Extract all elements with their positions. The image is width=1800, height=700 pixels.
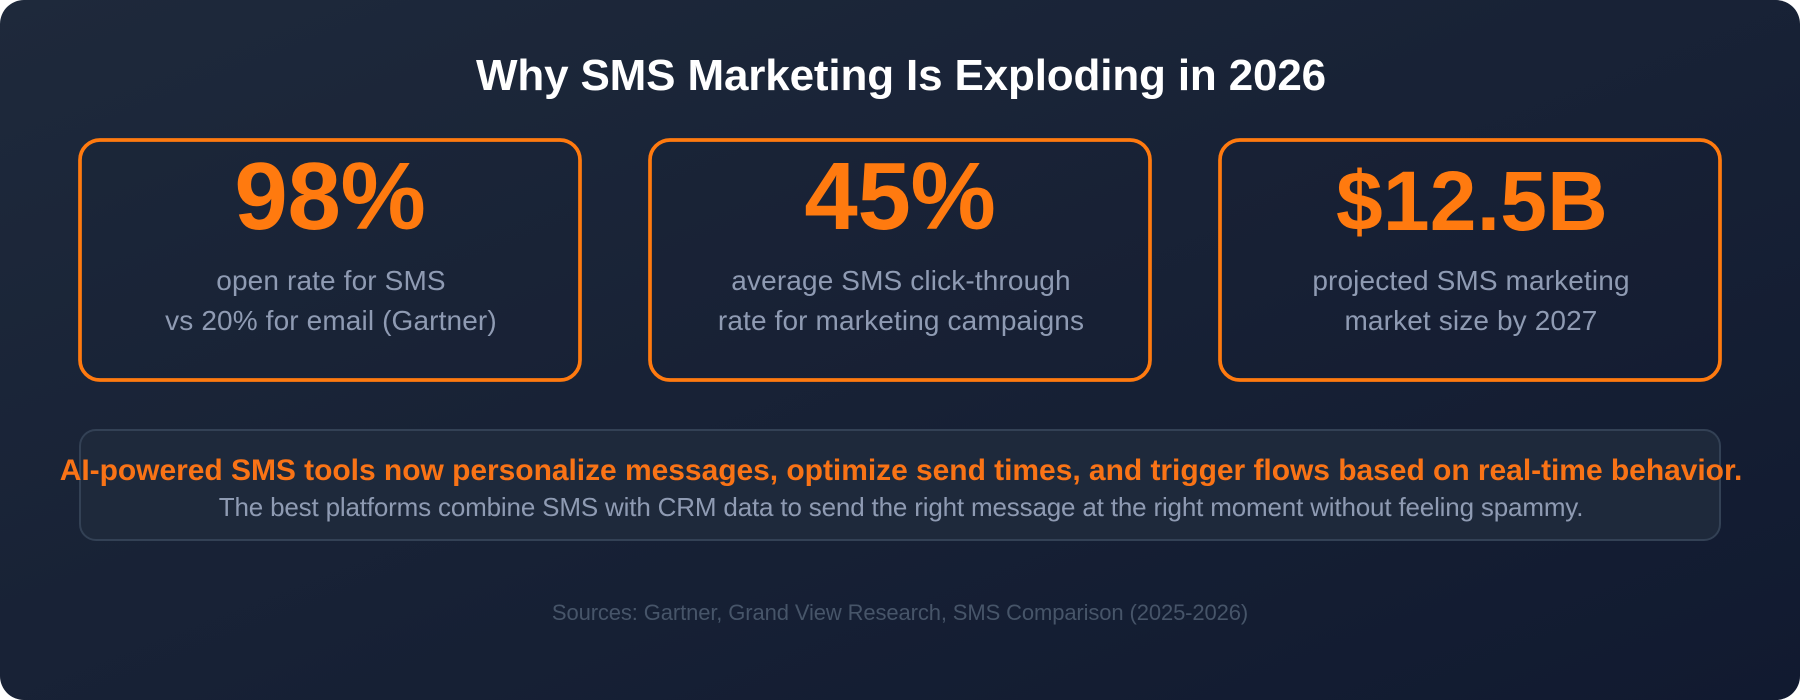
description [718, 265, 1084, 336]
panel: 45% click-through [648, 138, 1152, 382]
description [1312, 265, 1630, 336]
description: projected SMS marketing [1312, 265, 1630, 296]
card outline [1218, 138, 1722, 382]
description: average SMS click-through [731, 265, 1071, 296]
callout [60, 429, 1742, 541]
callout body: The best platforms combine SMS with CRM data to send the right message at the right moment without feeling spammy. [219, 492, 1583, 522]
callout headline: AI-powered SMS tools now personalize messages, optimize send times, and trigger flows based on real-time behavior. [60, 454, 1742, 487]
card outline [78, 138, 582, 382]
description [165, 265, 497, 336]
panel: 98% open rate [78, 138, 582, 382]
description: rate for marketing campaigns [718, 305, 1084, 336]
callout box [79, 429, 1721, 541]
title: Why SMS Marketing Is Exploding in 2026 [476, 51, 1326, 100]
description: market size by 2027 [1344, 305, 1598, 336]
description: vs 20% for email (Gartner) [165, 305, 497, 336]
stat: 98%: 98% [234, 143, 426, 250]
panel: $12.5B market size [1218, 138, 1722, 382]
stat: 45%: 45% [804, 143, 996, 250]
card outline [648, 138, 1152, 382]
sources: Sources: Gartner, Grand View Research, SMS Comparison (2025-2026) [552, 600, 1248, 625]
description: open rate for SMS [216, 265, 446, 296]
stat: $12.5B: $12.5B [1336, 154, 1608, 248]
